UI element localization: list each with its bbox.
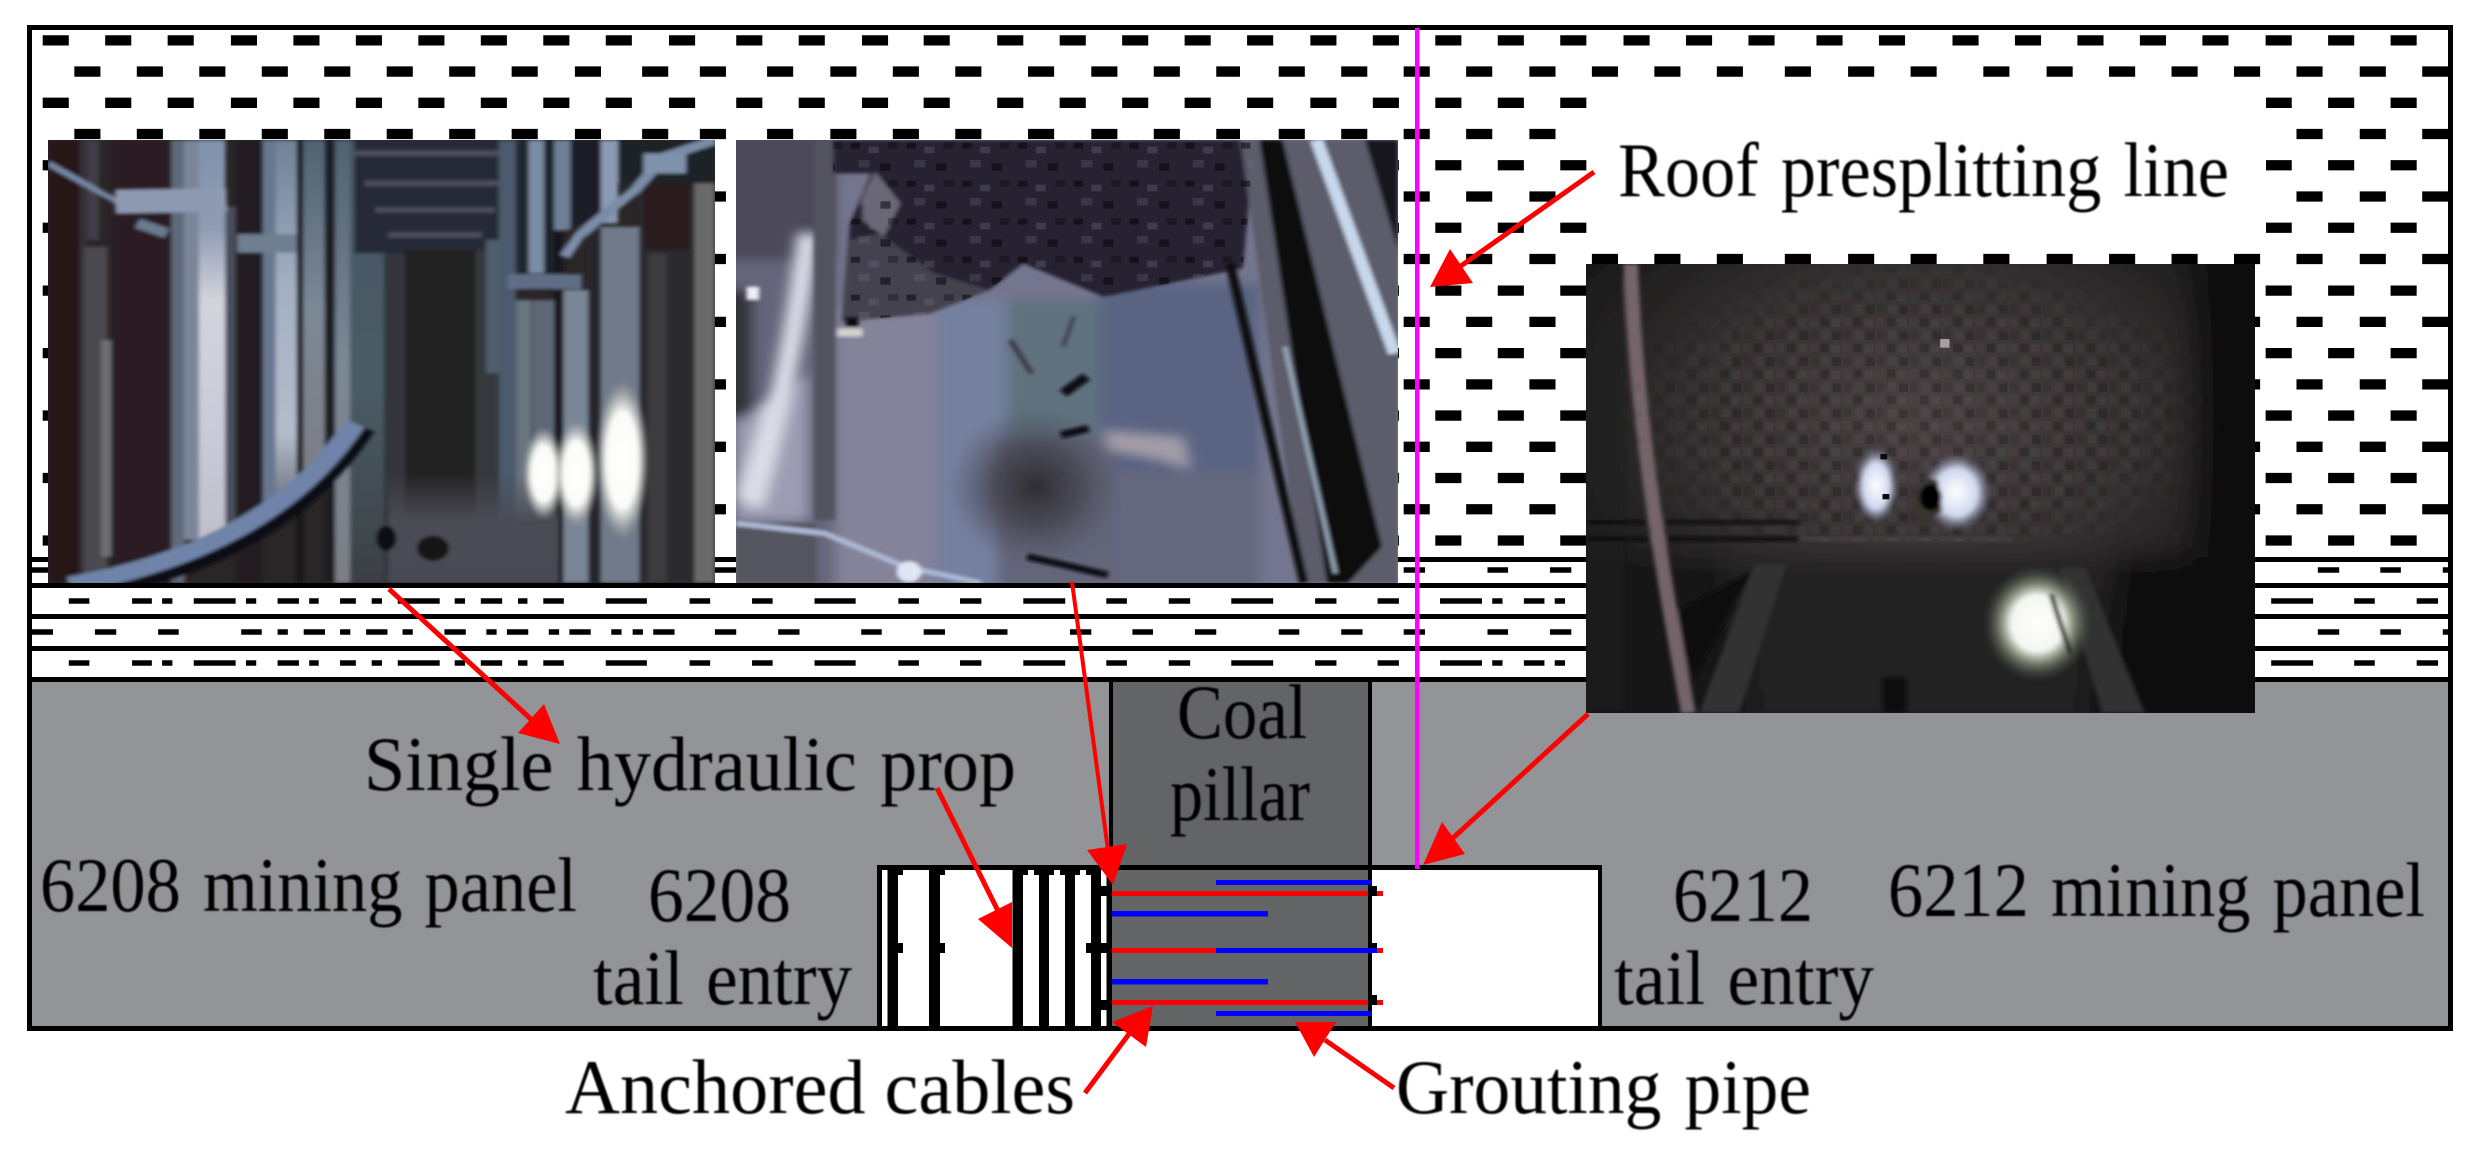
label: pillar: pillar bbox=[1170, 751, 1310, 837]
label: right tail entry: tail entry bbox=[1614, 935, 1874, 1021]
arrow: anchored cables bbox=[1085, 1006, 1153, 1093]
photo: presplitting borehole in roof bbox=[1586, 264, 2255, 713]
label: left tail entry: tail entry bbox=[593, 935, 852, 1021]
label: anchored cables: Anchored cables bbox=[565, 1044, 1075, 1130]
rock strata: mudstone roof pattern bbox=[43, 40, 2448, 541]
6212 tail entry bbox=[1109, 865, 1602, 1030]
arrow: grouting pipe bbox=[1295, 1022, 1394, 1088]
arrow: single hydraulic prop bbox=[937, 788, 1012, 948]
arrow: roof presplitting line bbox=[1430, 172, 1594, 287]
6208 tail entry with single hydraulic props bbox=[877, 865, 1112, 1030]
label: Coal: Coal bbox=[1177, 669, 1307, 755]
label: 6212 mining panel: 6212 mining panel bbox=[1888, 847, 2425, 933]
photo: anchored cable and mesh roof in tail entry bbox=[736, 140, 1398, 583]
coal seam bbox=[30, 682, 2450, 1027]
label: roof presplitting line: Roof presplitting line bbox=[1618, 127, 2229, 213]
arrow: photo to anchored cable anchorage bbox=[1072, 582, 1127, 885]
label: 6208 mining panel: 6208 mining panel bbox=[40, 842, 577, 928]
roof presplitting line bbox=[1415, 28, 1420, 869]
coal pillar bbox=[1109, 682, 1372, 1027]
label: single hydraulic prop: Single hydraulic prop bbox=[364, 721, 1016, 807]
label: grouting pipe: Grouting pipe bbox=[1396, 1044, 1811, 1130]
label: 6208: 6208 bbox=[648, 852, 791, 938]
arrow: photo to single hydraulic prop label bbox=[389, 589, 560, 744]
thin layered strata bands bbox=[30, 557, 2450, 682]
anchored cables and grouting pipes bbox=[1112, 880, 1383, 1016]
photo: single hydraulic props in tail entry bbox=[48, 140, 715, 583]
arrow: borehole photo to entry bbox=[1423, 714, 1588, 865]
label: 6212: 6212 bbox=[1673, 852, 1813, 938]
